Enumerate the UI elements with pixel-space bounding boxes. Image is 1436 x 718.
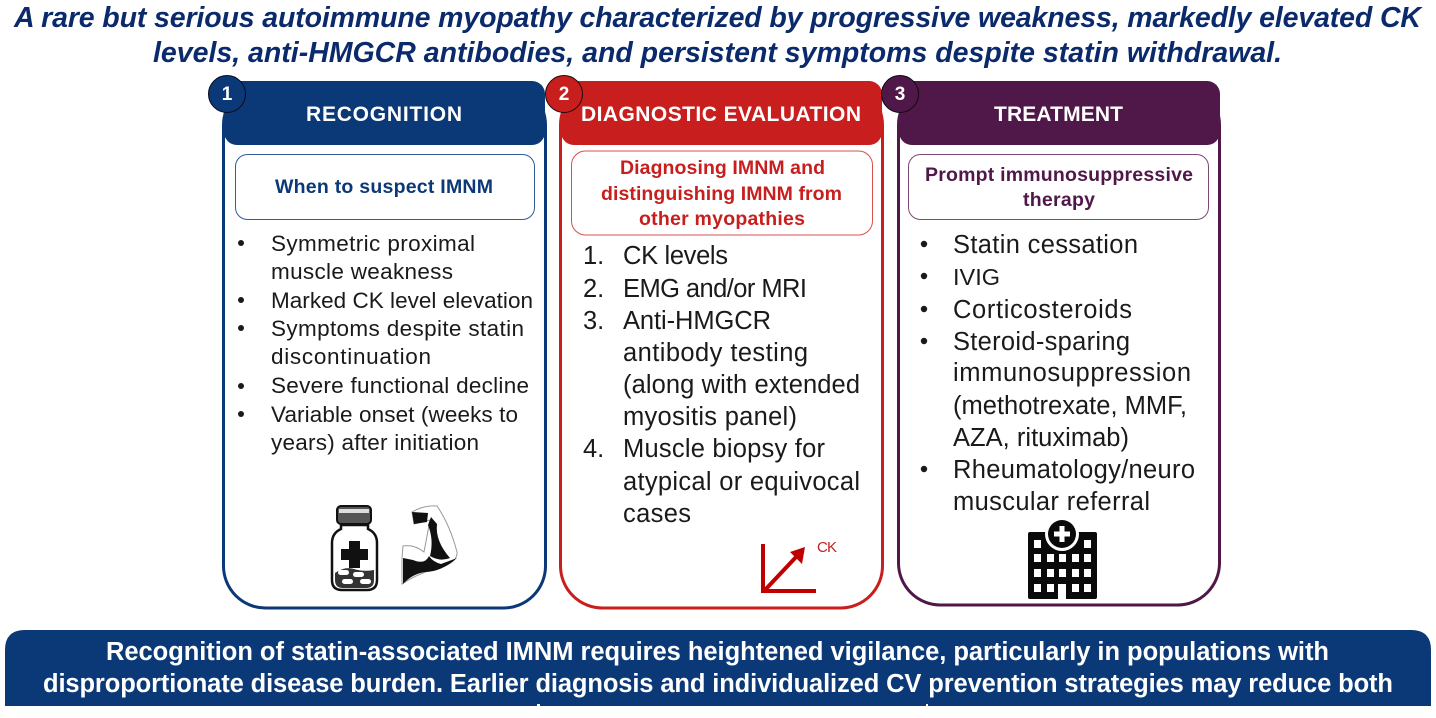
treatment bullet list: AZA, rituximab) (953, 424, 1129, 452)
title: A rare but serious autoimmune myopathy characterized by progressive weakness, markedly elevated CK (13, 2, 1423, 34)
recognition bullet list: years) after initiation (271, 430, 479, 455)
badge 3: 3 (895, 84, 905, 105)
icon: flexed arm muscle (402, 506, 457, 584)
header: diagnostic evaluation: DIAGNOSTIC EVALUATION (581, 103, 861, 126)
subheading: when to suspect: When to suspect IMNM (275, 176, 493, 198)
conclusion banner: Recognition of statin-associated IMNM requires heightened vigilance, particularly in populations with (106, 638, 1329, 666)
panel: recognition (208, 76, 546, 608)
diagnostic numbered list: cases (623, 500, 691, 528)
conclusion banner (5, 630, 1431, 706)
badge 1: 1 (222, 84, 233, 105)
treatment bullet list: immunosuppression (953, 359, 1191, 387)
diagnostic numbered list: myositis panel) (623, 403, 797, 431)
diagnostic numbered list: CK levels (623, 242, 728, 270)
diagnostic numbered list (583, 242, 860, 528)
treatment bullet list: Corticosteroids (953, 296, 1132, 324)
diagnostic numbered list: atypical or equivocal (623, 468, 860, 496)
subheading: diagnosing IMNM: Diagnosing IMNM and (620, 157, 825, 179)
subheading: prompt therapy: Prompt immunosuppressive (925, 164, 1193, 186)
diagnostic numbered list: Anti-HMGCR (623, 307, 771, 335)
header: treatment (899, 81, 1220, 145)
badge 2 (546, 76, 582, 112)
icon: hospital (1028, 517, 1097, 599)
treatment bullet list: muscular referral (953, 488, 1150, 516)
badge 1 (208, 76, 246, 112)
subheading: prompt therapy (908, 154, 1208, 220)
panel: diagnostic evaluation (546, 76, 882, 608)
treatment bullet list: IVIG (953, 264, 1000, 290)
diagnostic numbered list: Muscle biopsy for (623, 435, 826, 463)
treatment bullet list: Steroid-sparing (953, 328, 1130, 356)
diagnostic numbered list: 4. (583, 435, 604, 463)
icon: rising CK chart: CK (817, 539, 837, 556)
recognition bullet list (238, 231, 533, 455)
diagnostic numbered list: (along with extended (623, 371, 860, 399)
header: treatment: TREATMENT (994, 103, 1123, 126)
subheading: diagnosing IMNM (572, 151, 872, 235)
diagnostic numbered list: antibody testing (623, 339, 808, 367)
recognition bullet list: Marked CK level elevation (271, 288, 533, 313)
subheading: diagnosing IMNM: distinguishing IMNM from (601, 183, 842, 205)
treatment bullet list: Statin cessation (953, 231, 1138, 259)
diagnostic numbered list: 2. (583, 275, 604, 303)
badge 2: 2 (559, 84, 569, 105)
icon: rising CK chart (763, 539, 837, 591)
recognition bullet list: discontinuation (271, 344, 431, 369)
diagnostic numbered list: 3. (583, 307, 604, 335)
header: recognition (224, 81, 545, 145)
treatment bullet list (921, 231, 1195, 516)
title: levels, anti-HMGCR antibodies, and persistent symptoms despite statin withdrawal. (153, 37, 1282, 69)
diagnostic numbered list: EMG and/or MRI (623, 275, 807, 303)
title (13, 2, 1423, 69)
diagnostic numbered list: 1. (583, 242, 604, 270)
treatment bullet list: Rheumatology/neuro (953, 456, 1195, 484)
recognition bullet list: Severe functional decline (271, 373, 529, 398)
recognition bullet list: muscle weakness (271, 259, 453, 284)
subheading: when to suspect (236, 154, 534, 220)
subheading: prompt therapy: therapy (1023, 189, 1095, 211)
icon: pill bottle (332, 506, 377, 590)
header: diagnostic evaluation (561, 81, 882, 145)
treatment bullet list: (methotrexate, MMF, (953, 392, 1187, 420)
badge 3 (882, 76, 918, 112)
subheading: diagnosing IMNM: other myopathies (639, 208, 805, 230)
conclusion banner: disproportionate disease burden. Earlier diagnosis and individualized CV prevention strategies may reduce both (43, 670, 1393, 698)
panel: treatment (882, 76, 1220, 605)
recognition bullet list: Symptoms despite statin (271, 316, 524, 341)
recognition bullet list: Variable onset (weeks to (271, 402, 518, 427)
header: recognition: RECOGNITION (306, 103, 462, 126)
recognition bullet list: Symmetric proximal (271, 231, 475, 256)
